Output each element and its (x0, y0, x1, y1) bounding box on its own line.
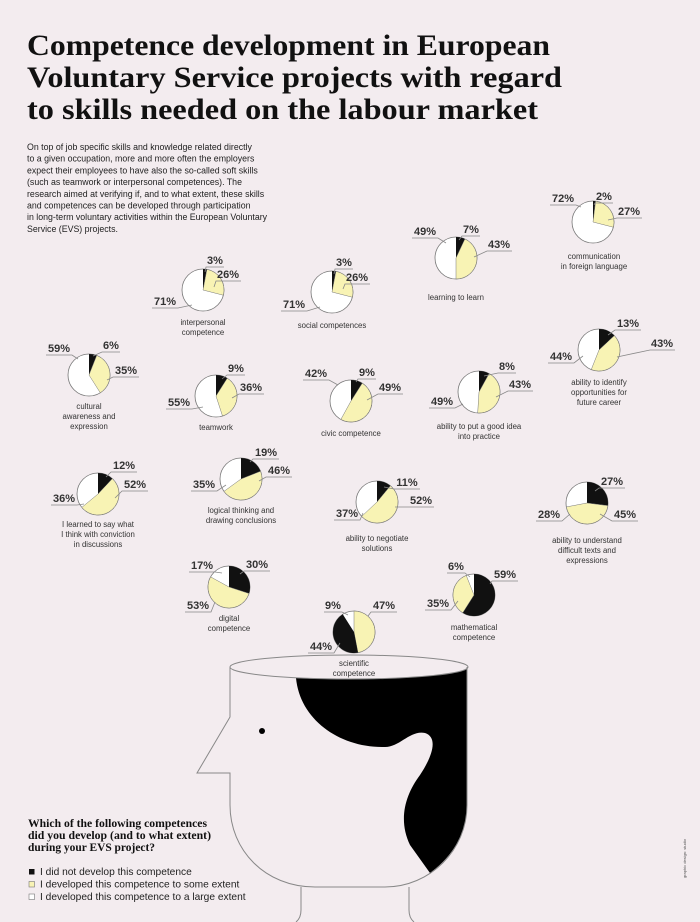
pie: difficult texts: 27% (601, 476, 623, 488)
pie: learning to learn: learning to learn (428, 293, 484, 302)
pie: civic competence: 49% (379, 382, 401, 394)
title: Competence development in European (27, 29, 550, 62)
pie: learning to learn: 43% (488, 239, 510, 251)
pie: I learned to say what I think: 52% (124, 479, 146, 491)
pie: I learned to say what I think: in discussions (74, 540, 122, 549)
pie: communication in foreign language: 72% (552, 193, 574, 205)
pie: cultural awareness: awareness and (63, 412, 115, 421)
pie: mathematical competence: mathematical (451, 623, 497, 632)
pie: learning to learn: 49% (414, 226, 436, 238)
pie: ability to negotiate solutions: 37% (336, 508, 358, 520)
pie: social competences: 26% (346, 272, 368, 284)
pie: ability to put a good idea into practice: 43% (509, 379, 531, 391)
pie: cultural awareness: 6% (103, 340, 119, 352)
pie: teamwork: 9% (228, 363, 244, 375)
intro text: expect their employees to have also the so-called soft skills (27, 165, 258, 175)
pie: interpersonal competence: 3% (207, 255, 223, 267)
pie: ability to identify opportunities: 44% (550, 351, 572, 363)
pie: civic competence: 42% (305, 368, 327, 380)
legend question: during your EVS project? (28, 842, 155, 854)
intro text: Service (EVS) projects. (27, 224, 118, 234)
pie: social competences: 3% (336, 257, 352, 269)
pie: ability to put a good idea into practice: ability to put a good idea (437, 422, 522, 431)
pie: ability to negotiate solutions: 11% (396, 477, 418, 489)
pie: ability to put a good idea into practice: into practice (458, 432, 500, 441)
pie: digital competence (185, 559, 270, 633)
pie: ability to put a good idea into practice: 49% (431, 396, 453, 408)
pie: interpersonal competence: 26% (217, 269, 239, 281)
pie: scientific competence: competence (333, 669, 375, 678)
pie: ability to put a good idea into practice: 8% (499, 361, 515, 373)
intro text: and competences can be developed through participation (27, 200, 251, 210)
pie: teamwork (166, 363, 264, 432)
pie: logical thinking: drawing conclusions (206, 516, 276, 525)
pie: cultural awareness: cultural (76, 402, 102, 411)
pie: mathematical competence: 35% (427, 598, 449, 610)
pie: ability to identify opportunities (548, 318, 675, 407)
pie: interpersonal competence: interpersonal (180, 318, 226, 327)
legend question: did you develop (and to what extent) (28, 830, 211, 842)
title: to skills needed on the labour market (27, 93, 538, 126)
pie: logical thinking: logical thinking and (208, 506, 274, 515)
credit: graphic design: studio (682, 838, 687, 878)
pie: social competences (281, 257, 370, 330)
pie: interpersonal competence: competence (182, 328, 224, 337)
pie: social competences: 71% (283, 299, 305, 311)
legend items: I developed this competence to a large extent (40, 892, 246, 903)
pie: teamwork: 36% (240, 382, 262, 394)
legend question: Which of the following competences (28, 818, 208, 830)
pie: difficult texts: difficult texts and (558, 546, 616, 555)
pie: interpersonal competence (152, 255, 241, 337)
pie: digital competence: 30% (246, 559, 268, 571)
pie: difficult texts: 28% (538, 509, 560, 521)
head illustration (197, 655, 468, 922)
pie: I learned to say what I think: 36% (53, 493, 75, 505)
pie: communication in foreign language: in foreign language (561, 262, 627, 271)
pie: ability to negotiate solutions: ability to negotiate (346, 534, 408, 543)
pie: ability to negotiate solutions: solutions (362, 544, 392, 553)
pie: communication in foreign language: 2% (596, 191, 612, 203)
pie: civic competence: 9% (359, 367, 375, 379)
pie: difficult texts: ability to understand (552, 536, 622, 545)
pie: communication in foreign language: communication (568, 252, 620, 261)
pie: logical thinking: 46% (268, 465, 290, 477)
pie: civic competence (303, 367, 403, 438)
pie: learning to learn (412, 224, 512, 302)
pie: learning to learn: 7% (463, 224, 479, 236)
pie: difficult texts: 45% (614, 509, 636, 521)
intro text: in long-term voluntary activities within the European Voluntary (27, 212, 268, 222)
pie: civic competence: civic competence (321, 429, 381, 438)
pie: ability to identify opportunities: opportunities for (571, 388, 627, 397)
pie: digital competence: competence (208, 624, 250, 633)
legend items: I did not develop this competence (40, 867, 192, 878)
legend items: I developed this competence to some extent (40, 880, 240, 890)
pie: ability to identify opportunities: future career (577, 398, 621, 407)
pie: scientific competence: 47% (373, 600, 395, 612)
pie: cultural awareness: 35% (115, 365, 137, 377)
pie: digital competence: 53% (187, 600, 209, 612)
title: Voluntary Service projects with regard (27, 61, 562, 94)
pie: digital competence: 17% (191, 560, 213, 572)
intro text: On top of job specific skills and knowledge related directly (27, 142, 253, 152)
pie: interpersonal competence: 71% (154, 296, 176, 308)
pie: ability to negotiate solutions: 52% (410, 495, 432, 507)
pie: ability to identify opportunities: 43% (651, 338, 673, 350)
pie: ability to identify opportunities: ability to identify (571, 378, 627, 387)
pie: communication in foreign language: 27% (618, 206, 640, 218)
pie: logical thinking (191, 447, 292, 525)
pie: scientific competence (308, 600, 397, 678)
intro text: to a given occupation, more and more often the employers (27, 154, 255, 164)
pie: scientific competence: 44% (310, 641, 332, 653)
pie: mathematical competence (425, 561, 518, 642)
pie: social competences: social competences (298, 321, 366, 330)
pie: digital competence: digital (219, 614, 239, 623)
pie: teamwork: 55% (168, 397, 190, 409)
pie: mathematical competence: 6% (448, 561, 464, 573)
intro text: research aimed at verifying if, and to what extent, these skills (27, 189, 265, 199)
pie: logical thinking: 35% (193, 479, 215, 491)
pie: communication in foreign language (550, 191, 642, 271)
pie: cultural awareness: 59% (48, 343, 70, 355)
intro text: (such as teamwork or interpersonal competences). The (27, 177, 242, 187)
pie: logical thinking: 19% (255, 447, 277, 459)
pie: ability to negotiate solutions (334, 477, 434, 553)
pie: scientific competence: 9% (325, 600, 341, 612)
pie: I learned to say what I think (51, 460, 148, 549)
pie: difficult texts (536, 476, 638, 565)
legend items (29, 867, 246, 903)
pie: difficult texts: expressions (566, 556, 608, 565)
pie: mathematical competence: 59% (494, 569, 516, 581)
pie: scientific competence: scientific (339, 659, 369, 668)
pie: ability to identify opportunities: 13% (617, 318, 639, 330)
pie: I learned to say what I think: I think with conviction (61, 530, 135, 539)
pie: mathematical competence: competence (453, 633, 495, 642)
pie: teamwork: teamwork (199, 423, 233, 432)
pie: I learned to say what I think: 12% (113, 460, 135, 472)
pie: ability to put a good idea into practice (429, 361, 533, 441)
pie: I learned to say what I think: I learned to say what (62, 520, 135, 529)
pie: cultural awareness (46, 340, 139, 431)
pie: cultural awareness: expression (70, 422, 108, 431)
